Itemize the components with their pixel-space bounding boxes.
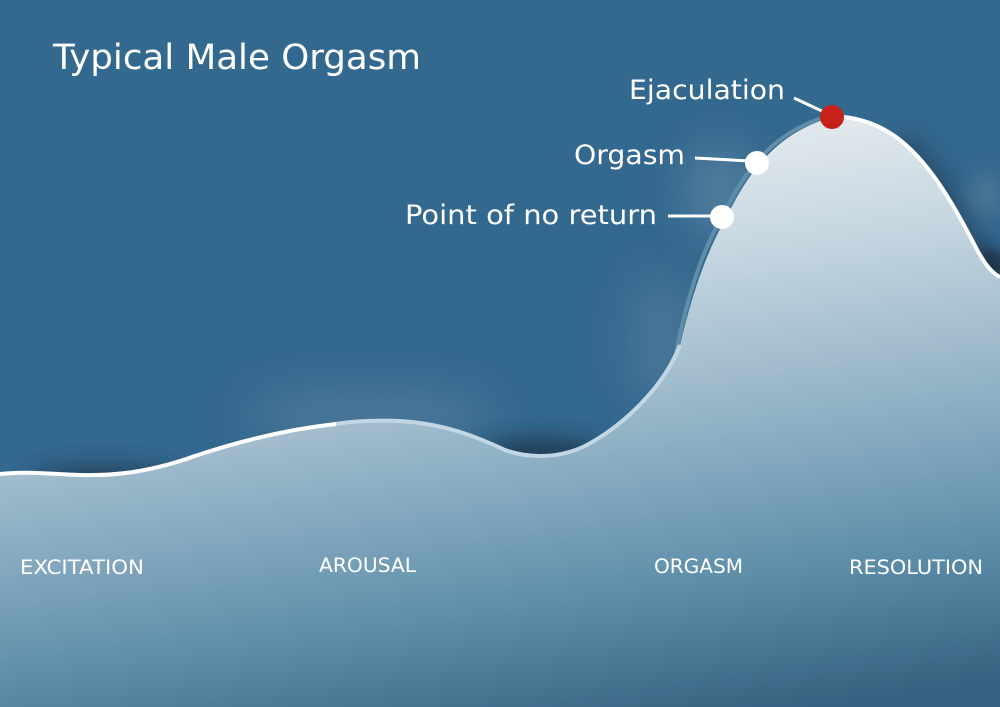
curve rim: rising translucent edge — [676, 115, 832, 352]
title: Typical Male Orgasm — [52, 38, 421, 78]
phase label: ORGASM: ORGASM — [654, 555, 743, 578]
phase label: AROUSAL: AROUSAL — [319, 554, 416, 577]
leader line: Ejaculation — [794, 98, 824, 112]
label: Point of no return: Point of no return — [405, 200, 657, 231]
phase label: RESOLUTION: RESOLUTION — [849, 556, 983, 579]
phase label: EXCITATION: EXCITATION — [20, 556, 144, 579]
label: Ejaculation: Ejaculation — [629, 75, 785, 106]
marker: Point of no return — [710, 205, 734, 229]
curve line: excitation — [0, 424, 336, 475]
leader line: Orgasm — [695, 158, 750, 161]
curve rim: arousal to orgasm pale edge — [335, 345, 680, 456]
leader line: Point of no return — [668, 214, 715, 218]
marker: Orgasm — [745, 151, 769, 175]
marker: Ejaculation — [820, 105, 844, 129]
label: Orgasm: Orgasm — [574, 140, 685, 171]
curve line: resolution — [832, 117, 1000, 277]
shadows and glows behind the curve — [30, 140, 1000, 494]
